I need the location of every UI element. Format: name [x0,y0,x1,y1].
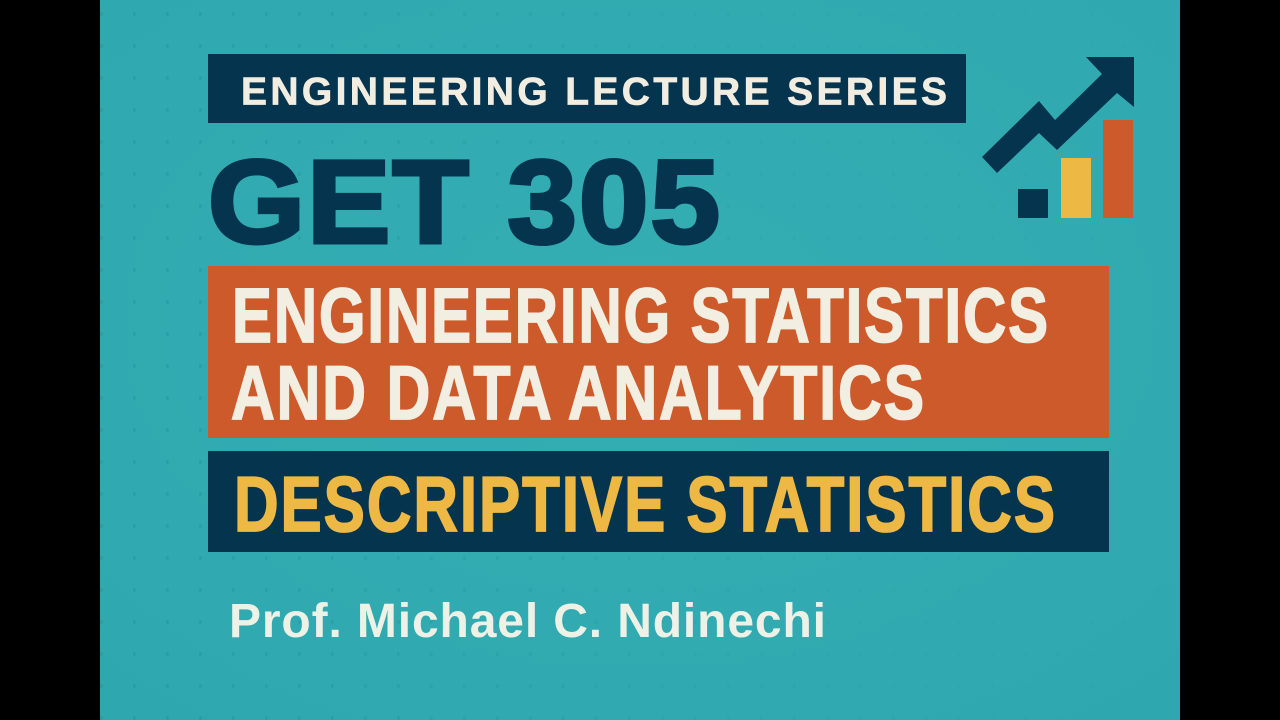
icon: tall orange bar [1103,120,1133,218]
topic banner: DESCRIPTIVE STATISTICS [234,460,1057,548]
icon: rising arrow and bars [982,57,1134,218]
subject banner [208,266,1109,438]
course code title: GET 305 [208,136,722,268]
icon: medium yellow bar [1061,158,1091,218]
series banner [208,54,966,123]
lecturer name: Prof. Michael C. Ndinechi [229,595,826,648]
subject banner: AND DATA ANALYTICS [231,351,926,436]
icon: zigzag arrow [982,57,1134,173]
subject banner: ENGINEERING STATISTICS [232,273,1050,359]
series banner: ENGINEERING LECTURE SERIES [241,70,947,114]
icon: short navy bar [1018,189,1048,218]
